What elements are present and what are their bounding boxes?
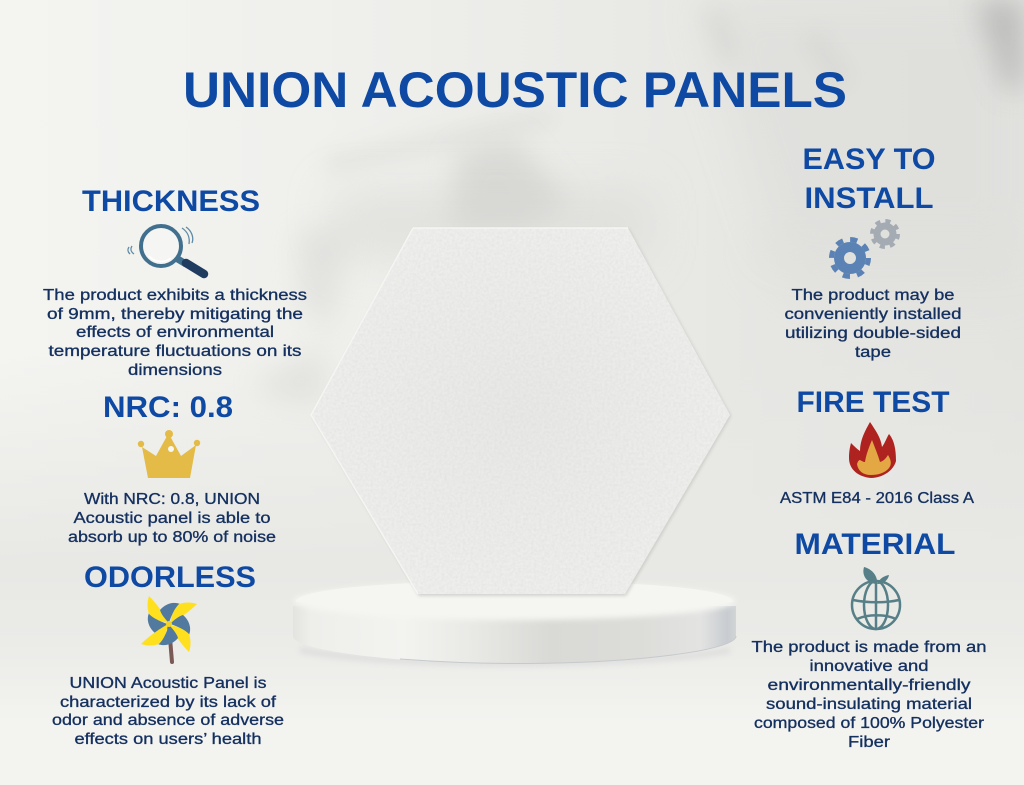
text: material description [752,639,986,751]
icon: globe with leaves [852,567,900,629]
text: odorless description [52,675,284,748]
icon: flame [849,422,896,478]
section: material [752,528,986,751]
text: easy to install description [784,287,962,361]
heading: easy to install: INSTALL [804,182,934,215]
icon: gears [832,221,898,276]
section: NRC [68,391,276,546]
icon: pinwheel [141,596,197,662]
icon: crown [138,430,200,478]
text: material description: innovative and [810,658,928,675]
text: odorless description: effects on users’ health [74,731,262,748]
heading: thickness: THICKNESS [82,185,260,218]
text: NRC description: absorb up to 80% of noise [68,529,276,546]
text: NRC description: With NRC: 0.8, UNION [84,491,260,508]
text: odorless description: UNION Acoustic Panel is [70,675,267,692]
text: thickness description: dimensions [128,362,222,379]
text: fire test description: ASTM E84 - 2016 Class A [780,490,975,507]
text: material description: sound-insulating material [766,696,972,713]
text: thickness description: temperature fluctuations on its [48,343,302,360]
section: fire test [780,386,975,507]
text: easy to install description: utilizing double-sided [785,325,961,342]
section: thickness [43,185,307,379]
text: thickness description: The product exhibits a thickness [43,287,307,304]
heading: easy to install [802,143,936,215]
text: NRC description: Acoustic panel is able to [74,510,270,527]
text: easy to install description: tape [855,344,891,361]
text: NRC description [68,491,276,546]
text: easy to install description: The product may be [792,287,954,304]
text: easy to install description: conveniently installed [784,306,962,323]
text: thickness description: effects of environmental [76,324,274,341]
heading: odorless: ODORLESS [84,561,256,594]
text: material description: composed of 100% Polyester [754,715,984,732]
podium [293,581,736,664]
heading: easy to install: EASY TO [802,143,936,176]
hexagon acoustic panel [311,228,731,596]
text: material description: environmentally-friendly [768,677,971,694]
icon: magnifying glass [128,226,204,274]
text: material description: Fiber [848,734,890,751]
section: easy to install [784,143,962,361]
title: UNION ACOUSTIC PANELS [183,62,847,118]
text: material description: The product is made from an [752,639,986,656]
text: odorless description: odor and absence of adverse [52,712,284,729]
text: thickness description: of 9mm, thereby mitigating the [47,306,303,323]
section: odorless [52,561,284,748]
heading: material: MATERIAL [794,528,956,561]
heading: fire test: FIRE TEST [796,386,950,419]
heading: NRC: NRC: 0.8 [103,391,233,424]
text: thickness description [43,287,307,379]
text: odorless description: characterized by its lack of [60,694,277,711]
